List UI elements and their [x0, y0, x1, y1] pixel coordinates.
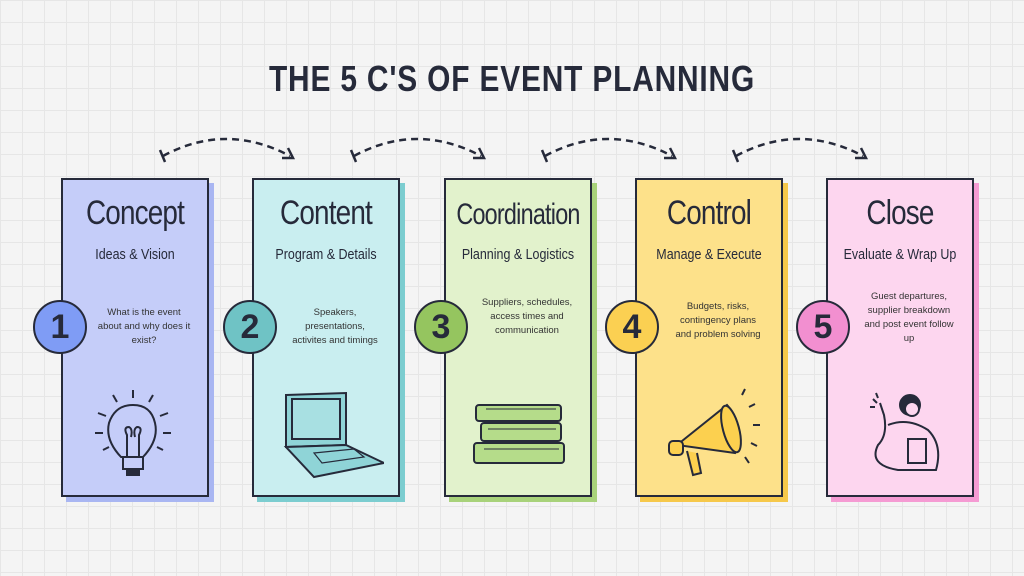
panel: concept: Ideas & Vision [95, 247, 175, 263]
icon: woman with books [870, 392, 940, 471]
panel: concept: What is the event about and why does it exist? [98, 307, 190, 346]
number 1 [33, 300, 87, 354]
number 1: 1 [51, 308, 69, 346]
icon: laptop [284, 392, 384, 478]
panel: coordination: Suppliers, schedules, access times and communication [482, 297, 572, 336]
panel: content: Program & Details [275, 247, 377, 263]
arrows [158, 138, 868, 162]
number 2: 2 [241, 308, 259, 346]
panel: coordination [444, 178, 592, 497]
icon: megaphone [668, 388, 760, 476]
icon: books [473, 404, 565, 464]
panel: close [826, 178, 974, 497]
panel: close: Guest departures, supplier breakdown and post event follow up [864, 291, 954, 344]
number 3: 3 [432, 308, 450, 346]
panel: coordination: Coordination [456, 198, 580, 231]
number 4 [605, 300, 659, 354]
title: THE 5 C'S OF EVENT PLANNING [269, 58, 755, 99]
number 4: 4 [623, 308, 641, 346]
number 3 [414, 300, 468, 354]
panel: content: Content [280, 194, 372, 232]
panel: concept [61, 178, 209, 497]
panel: concept: Concept [86, 194, 184, 232]
panel: control: Manage & Execute [656, 247, 762, 263]
panel: coordination: Planning & Logistics [462, 247, 574, 263]
number 2 [223, 300, 277, 354]
panel: content: Speakers, presentations, activites and timings [292, 307, 378, 346]
panel: close: Close [866, 194, 934, 232]
number 5: 5 [814, 308, 832, 346]
panel: control: Budgets, risks, contingency plans and problem solving [675, 301, 761, 340]
icon: lightbulb [95, 390, 171, 476]
panel: control: Control [667, 194, 751, 232]
number 5 [796, 300, 850, 354]
panel: close: Evaluate & Wrap Up [844, 247, 956, 263]
panel: content [252, 178, 400, 497]
panel: control [635, 178, 783, 497]
